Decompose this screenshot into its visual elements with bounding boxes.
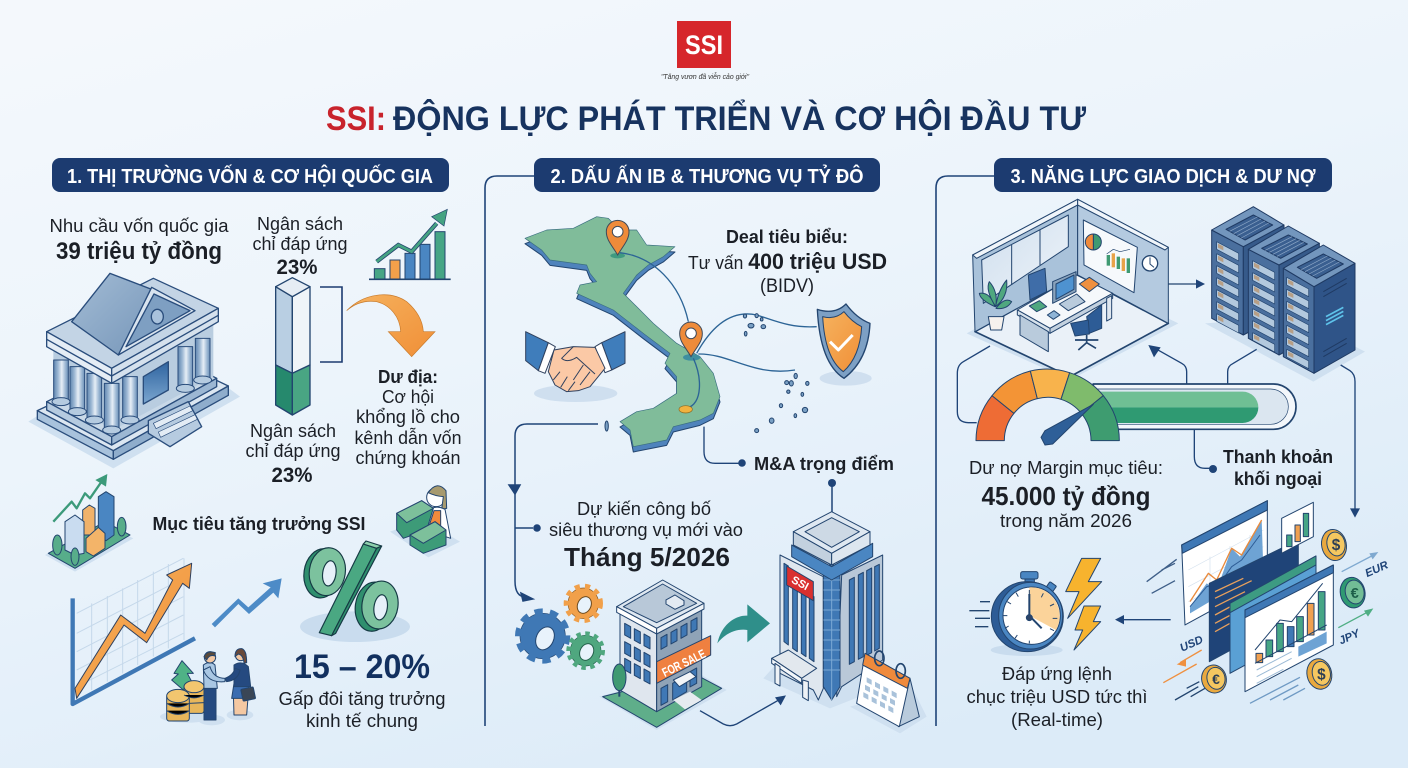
icon: gears bbox=[519, 587, 602, 667]
icon: calendar bbox=[850, 651, 927, 733]
icon: SSI tower bbox=[763, 512, 893, 708]
connector: panel 3 frame line bbox=[936, 176, 994, 726]
connector: M&A to tower bbox=[828, 479, 836, 512]
text: real-time order handling bbox=[966, 664, 1148, 730]
bar: budget share column bbox=[276, 278, 310, 415]
icon: building for sale: FOR SALE bbox=[660, 647, 708, 680]
text: margin target: Dư nợ Margin mục tiêu: bbox=[969, 458, 1163, 478]
text: budget covers 23 percent top bbox=[252, 214, 348, 279]
text: announcement timing: Tháng 5/2026 bbox=[564, 542, 730, 572]
text: budget covers 23 percent bottom: 23% bbox=[272, 464, 313, 487]
text: margin target bbox=[969, 458, 1163, 531]
text: foreign liquidity: khối ngoại bbox=[1234, 469, 1322, 489]
text: headroom callout: kênh dẫn vốn bbox=[354, 427, 462, 448]
text: 15 to 20 percent: kinh tế chung bbox=[306, 710, 418, 731]
text: 15 to 20 percent bbox=[278, 648, 446, 731]
icon: trading screens and currencies: $ bbox=[1332, 537, 1341, 554]
text: budget covers 23 percent bottom bbox=[246, 421, 340, 487]
icon: person with cash bbox=[390, 486, 460, 557]
text: real-time order handling: (Real-time) bbox=[1011, 710, 1103, 730]
text: headroom callout: Cơ hội bbox=[382, 387, 434, 407]
icon: map pin central bbox=[680, 322, 702, 357]
text: foreign liquidity: Thanh khoản bbox=[1223, 447, 1333, 467]
icon: trading screens and currencies: $ bbox=[1317, 666, 1326, 683]
text: announcement timing bbox=[549, 499, 743, 572]
text: budget covers 23 percent top: Ngân sách bbox=[257, 214, 343, 234]
icon: bank building bbox=[28, 273, 240, 468]
chart: growth line with orange arrow bbox=[73, 558, 195, 704]
text: featured deal: (BIDV) bbox=[760, 276, 814, 297]
chart: gauge bbox=[976, 369, 1119, 445]
logo: SSI: "Tăng vươn đã viễn cảo giới" bbox=[661, 72, 750, 81]
arrow: teal acquisition bbox=[717, 604, 770, 643]
icon: trading screens and currencies: JPY bbox=[1337, 627, 1363, 647]
connector: flow lines around gauge bbox=[957, 345, 1355, 470]
icon: trading screens and currencies: € bbox=[1212, 671, 1220, 687]
panel: capital market and national opportunity bbox=[28, 158, 462, 731]
panel: trading capacity and margin bbox=[936, 158, 1391, 730]
text: 15 to 20 percent: 15 – 20% bbox=[294, 648, 430, 686]
text: featured deal: Tư vấn 400 triệu USD bbox=[688, 249, 887, 274]
heading: panel 2 bbox=[534, 158, 880, 192]
connector: left flow to gears bbox=[509, 424, 598, 601]
text: budget covers 23 percent top: 23% bbox=[276, 256, 318, 279]
arrow: blue zigzag up bbox=[212, 578, 282, 627]
heading: panel 3: 3. NĂNG LỰC GIAO DỊCH & DƯ NỢ bbox=[1010, 165, 1316, 188]
icon: handshake bbox=[526, 332, 625, 402]
heading: panel 1: 1. THỊ TRƯỜNG VỐN & CƠ HỘI QUỐC GIA bbox=[67, 164, 433, 188]
title: ĐỘNG LỰC PHÁT TRIỂN VÀ CƠ HỘI ĐẦU TƯ bbox=[393, 99, 1087, 138]
icon: stopwatch with lightning bbox=[969, 558, 1102, 656]
connector: M&A line bbox=[704, 427, 742, 463]
text: SSI growth target: Mục tiêu tăng trưởng SSI bbox=[152, 514, 366, 534]
logo: SSI: SSI bbox=[685, 30, 723, 60]
icon: trading screens and currencies: USD bbox=[1178, 634, 1205, 655]
text: budget covers 23 percent bottom: Ngân sách bbox=[250, 421, 336, 441]
text: real-time order handling: chục triệu USD tức thì bbox=[966, 687, 1148, 707]
text: M&A focus: M&A trọng điểm bbox=[754, 453, 894, 474]
heading: panel 3 bbox=[994, 158, 1332, 192]
text: headroom callout: Dư địa: bbox=[378, 367, 438, 387]
text: announcement timing: siêu thương vụ mới vào bbox=[549, 520, 743, 540]
text: headroom callout: khổng lồ cho bbox=[356, 407, 460, 427]
text: featured deal: Deal tiêu biểu: bbox=[726, 227, 848, 247]
panel: IB footprint and billion-dollar deals bbox=[485, 158, 927, 733]
arrow: orange curved down bbox=[347, 295, 435, 357]
text: foreign liquidity bbox=[1209, 447, 1333, 489]
icon: business partners with coins bbox=[160, 649, 256, 725]
text: budget covers 23 percent top: chỉ đáp ứng bbox=[252, 234, 348, 254]
icon: shield with check bbox=[817, 304, 872, 386]
text: national capital demand: 39 triệu tỷ đồng bbox=[56, 238, 222, 265]
connector: building to tower bbox=[700, 695, 786, 726]
text: margin target: 45.000 tỷ đồng bbox=[982, 481, 1150, 511]
chart: margin progress bar bbox=[1093, 384, 1296, 429]
text: national capital demand: Nhu cầu vốn quốc gia bbox=[50, 216, 230, 236]
icon: trading screens and currencies bbox=[1147, 470, 1391, 703]
arrow: screens to stopwatch bbox=[1115, 615, 1171, 624]
icon: building for sale bbox=[599, 580, 727, 730]
text: headroom callout bbox=[354, 367, 462, 468]
text: real-time order handling: Đáp ứng lệnh bbox=[1002, 664, 1112, 684]
text: featured deal bbox=[688, 227, 887, 297]
icon: city skyline with arrow bbox=[45, 474, 133, 572]
text: 15 to 20 percent: Gấp đôi tăng trưởng bbox=[278, 688, 446, 709]
icon: 3D percent sign bbox=[300, 541, 410, 642]
title: SSI: bbox=[326, 100, 386, 138]
icon: map pin north bbox=[606, 220, 629, 255]
map: Vietnam bbox=[525, 217, 817, 452]
icon: rising bar chart bbox=[369, 209, 451, 279]
connector: panel 2 frame line bbox=[485, 176, 534, 726]
heading: panel 1 bbox=[52, 158, 449, 192]
icon: server racks bbox=[1205, 207, 1365, 382]
text: national capital demand bbox=[50, 216, 230, 265]
icon: trading screens and currencies: EUR bbox=[1363, 559, 1391, 580]
heading: panel 2: 2. DẤU ẤN IB & THƯƠNG VỤ TỶ ĐÔ bbox=[550, 164, 864, 188]
bracket: gap range bbox=[320, 287, 342, 362]
text: announcement timing: Dự kiến công bố bbox=[577, 499, 711, 519]
icon: isometric trading office bbox=[967, 199, 1205, 380]
icon: SSI tower: SSI bbox=[789, 574, 810, 593]
text: margin target: trong năm 2026 bbox=[1000, 511, 1132, 531]
text: headroom callout: chứng khoán bbox=[356, 448, 460, 468]
logo: SSI bbox=[661, 21, 750, 81]
text: budget covers 23 percent bottom: chỉ đáp ứng bbox=[246, 441, 340, 461]
icon: trading screens and currencies: € bbox=[1351, 586, 1359, 602]
